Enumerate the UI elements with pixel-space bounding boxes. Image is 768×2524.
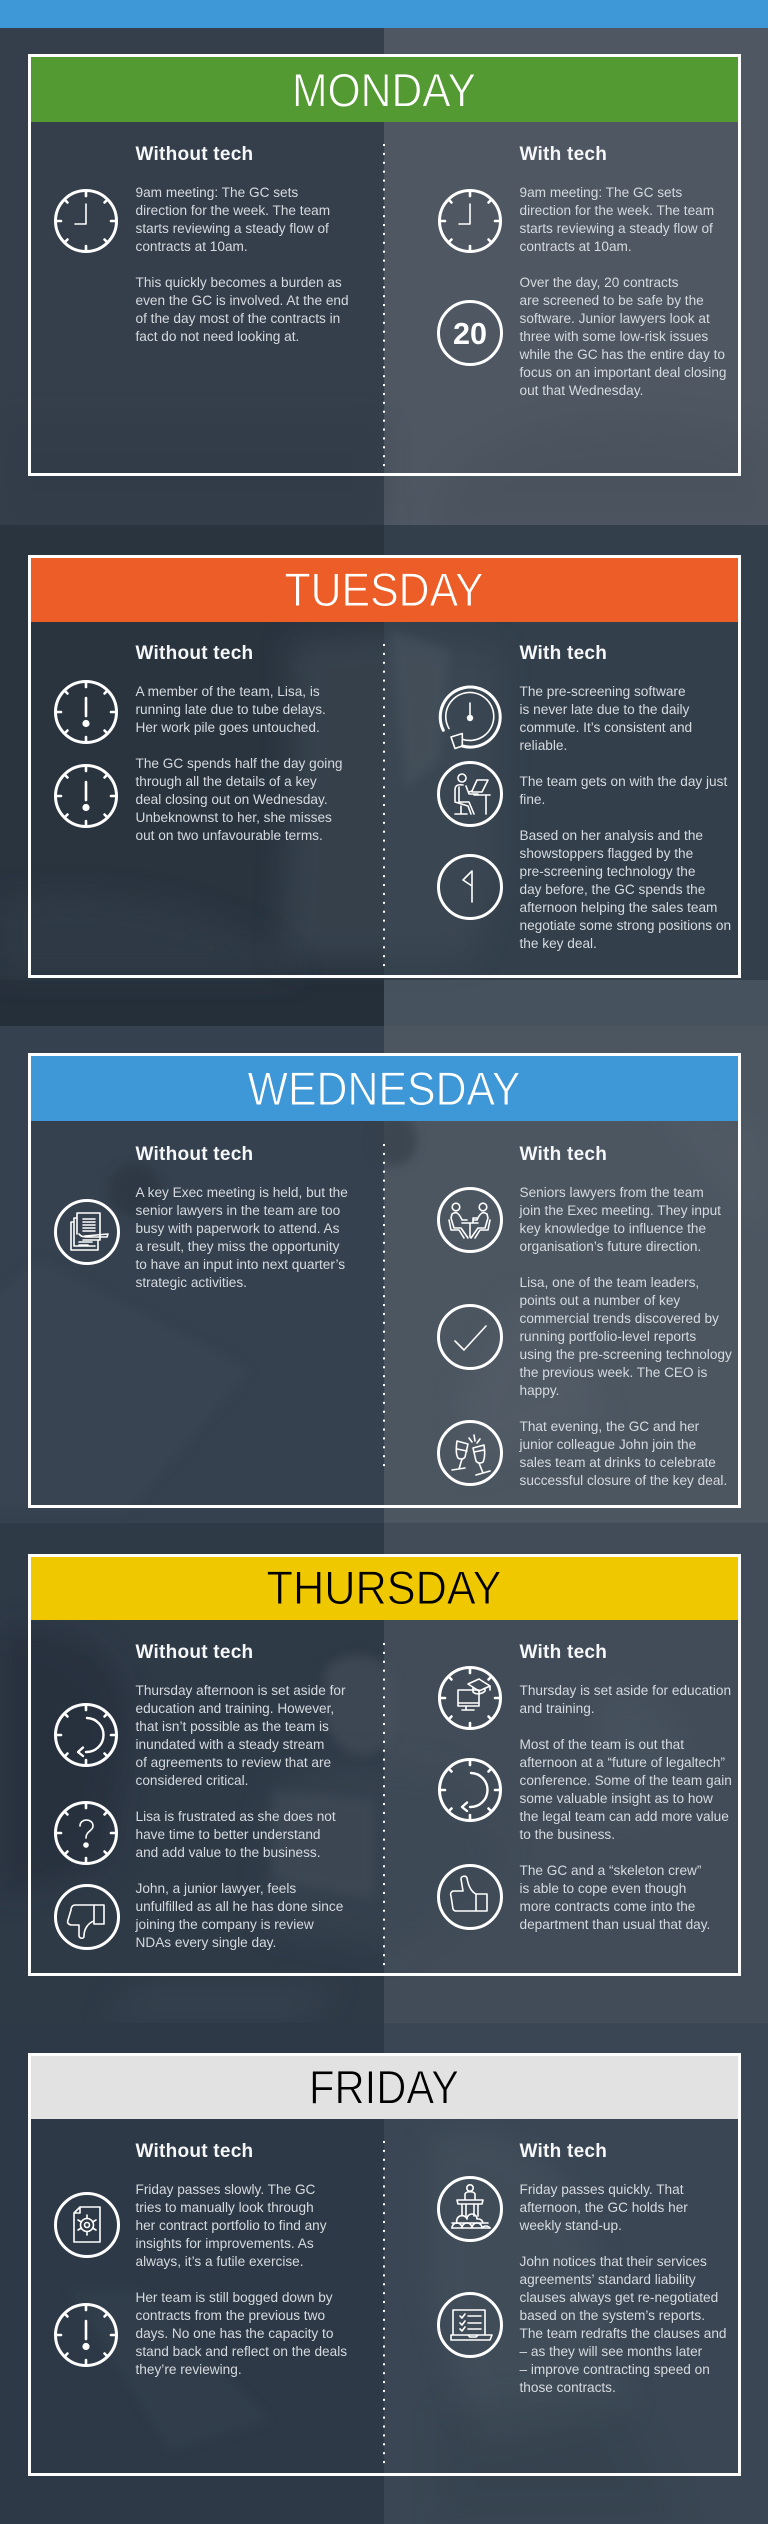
text: monday without tech: even the GC is involved. At the end (136, 293, 349, 308)
text: friday without tech: her contract portfolio to find any (136, 2218, 327, 2233)
text: thursday with tech: and training. (520, 1701, 595, 1716)
text: wednesday with tech: the previous week. The CEO is (520, 1365, 707, 1380)
icon: paperwork (54, 1199, 120, 1265)
heading: tuesday (31, 558, 738, 622)
text: monday with tech: three with some low-risk issues (520, 329, 708, 344)
text: thursday without tech: that isn’t possible as the team is (136, 1719, 329, 1734)
text: friday without tech: always, it’s a futile exercise. (136, 2254, 304, 2269)
panel: wednesday (28, 1053, 741, 1508)
icon: graduation monitor (438, 1666, 502, 1730)
icon: thumbs down (54, 1884, 120, 1950)
heading: wednesday: WEDNESDAY (248, 1062, 520, 1115)
text: thursday with tech: more contracts come into the (520, 1899, 695, 1914)
text: wednesday with tech: running portfolio-level reports (520, 1329, 696, 1344)
label: tuesday without tech: Without tech (136, 643, 253, 664)
text: tuesday without tech: Her work pile goes untouched. (136, 720, 320, 735)
text: friday with tech: clauses always get re-negotiated (520, 2290, 718, 2305)
divider: monday (383, 144, 385, 469)
text: thursday without tech: education and training. However, (136, 1701, 334, 1716)
icon: settings document (54, 2192, 120, 2258)
text: monday with tech: direction for the week. The team (520, 203, 714, 218)
panel: thursday (28, 1554, 741, 1976)
heading: friday: FRIDAY (309, 2060, 459, 2114)
text: tuesday without tech: through all the details of a key (136, 774, 317, 789)
icon: question clock (54, 1801, 118, 1865)
text: monday without tech: direction for the week. The team (136, 203, 330, 218)
text: thursday without tech: inundated with a steady stream (136, 1737, 324, 1752)
text: monday without tech: 9am meeting: The GC sets (136, 185, 298, 200)
panel: monday (28, 54, 741, 476)
text: thursday with tech: some valuable insight as to how (520, 1791, 713, 1806)
text: tuesday with tech (520, 684, 731, 951)
text: monday without tech: of the day most of the contracts in (136, 311, 340, 326)
text: tuesday without tech: out on two unfavourable terms. (136, 828, 323, 843)
text: monday with tech: out that Wednesday. (520, 383, 643, 398)
text: thursday with tech: Thursday is set aside for education (520, 1683, 731, 1698)
text: thursday without tech: and add value to the business. (136, 1845, 321, 1860)
label: monday without tech: Without tech (136, 144, 253, 165)
text: tuesday with tech: afternoon helping the sales team (520, 900, 717, 915)
text: wednesday with tech: using the pre-screening technology (520, 1347, 732, 1362)
heading: thursday (31, 1557, 738, 1620)
label: wednesday without tech: Without tech (136, 1144, 253, 1165)
top bar (0, 0, 768, 28)
text: tuesday with tech: The team gets on with the day just (520, 774, 727, 789)
text: monday with tech: contracts at 10am. (520, 239, 632, 254)
text: friday without tech: Her team is still bogged down by (136, 2290, 333, 2305)
text: wednesday with tech: points out a number of key (520, 1293, 680, 1308)
friday bg (0, 2023, 384, 2524)
text: wednesday without tech: to have an input into next quarter’s (136, 1257, 345, 1272)
text: thursday without tech: Thursday afternoon is set aside for (136, 1683, 346, 1698)
text: friday with tech: agreements’ standard liability (520, 2272, 696, 2287)
icon: flag (437, 854, 503, 920)
text: friday without tech: insights for improvements. As (136, 2236, 314, 2251)
label: monday with tech: With tech (520, 144, 607, 165)
text: monday without tech: contracts at 10am. (136, 239, 248, 254)
text: tuesday without tech: The GC spends half the day going (136, 756, 343, 771)
text: thursday with tech: the legal team can add more value (520, 1809, 729, 1824)
icon: looping clock (54, 1703, 118, 1767)
text: friday without tech: days. No one has the capacity to (136, 2326, 333, 2341)
text: wednesday with tech: That evening, the GC and her (520, 1419, 699, 1434)
text: wednesday with tech: sales team at drinks to celebrate (520, 1455, 716, 1470)
text: wednesday without tech: A key Exec meeting is held, but the (136, 1185, 348, 1200)
text: friday without tech: they’re reviewing. (136, 2362, 242, 2377)
icon: clock (54, 189, 118, 253)
text: thursday without tech: John, a junior lawyer, feels (136, 1881, 296, 1896)
text: thursday without tech: joining the company is review (136, 1917, 314, 1932)
text: monday with tech: starts reviewing a steady flow of (520, 221, 713, 236)
label: thursday with tech: With tech (520, 1642, 607, 1663)
text: thursday with tech: Most of the team is out that (520, 1737, 684, 1752)
text: wednesday with tech: Lisa, one of the team leaders, (520, 1275, 699, 1290)
text: thursday with tech: department than usual that day. (520, 1917, 710, 1932)
text: tuesday with tech: pre-screening technology the (520, 864, 695, 879)
text: tuesday with tech: The pre-screening software (520, 684, 686, 699)
text: wednesday without tech: strategic activities. (136, 1275, 247, 1290)
wednesday bg (0, 1026, 384, 1523)
heading: monday (31, 57, 738, 122)
text: wednesday without tech: senior lawyers in the team are too (136, 1203, 340, 1218)
text: wednesday without tech: a result, they miss the opportunity (136, 1239, 339, 1254)
text: wednesday with tech: Seniors lawyers from the team (520, 1185, 704, 1200)
text: tuesday with tech: reliable. (520, 738, 567, 753)
icon: person at desk (437, 761, 503, 827)
text: tuesday with tech: showstoppers flagged by the (520, 846, 693, 861)
thursday bg (0, 1523, 384, 2023)
tuesday bg (0, 525, 384, 1026)
icon: number 20 (437, 300, 503, 366)
text: monday without tech: This quickly becomes a burden as (136, 275, 342, 290)
icon: thumbs up (437, 1864, 503, 1930)
text: thursday with tech: The GC and a “skeleton crew” (520, 1863, 701, 1878)
text: thursday without tech: considered critical. (136, 1773, 248, 1788)
text: friday without tech: tries to manually look through (136, 2200, 314, 2215)
icon: looping clock (438, 1758, 502, 1822)
text: wednesday with tech: key knowledge to influence the (520, 1221, 706, 1236)
text: friday with tech: based on the system’s reports. (520, 2308, 705, 2323)
icon: champagne toast (437, 1420, 503, 1486)
divider: tuesday (383, 644, 385, 969)
text: friday without tech: stand back and reflect on the deals (136, 2344, 347, 2359)
panel: tuesday (28, 555, 741, 978)
text: friday with tech: The team redrafts the clauses and (520, 2326, 726, 2341)
icon: alert clock (54, 764, 118, 828)
text: tuesday without tech: A member of the team, Lisa, is (136, 684, 320, 699)
label: thursday without tech: Without tech (136, 1642, 253, 1663)
text: monday with tech: Over the day, 20 contracts (520, 275, 678, 290)
icon: podium speaker (437, 2176, 503, 2242)
text: monday with tech: while the GC has the entire day to (520, 347, 725, 362)
icon: alert clock (54, 2303, 118, 2367)
text: thursday without tech: unfulfilled as all he has done since (136, 1899, 343, 1914)
text: thursday without tech: NDAs every single day. (136, 1935, 276, 1950)
text: wednesday with tech: happy. (520, 1383, 559, 1398)
text: tuesday without tech (136, 684, 343, 843)
text: friday without tech: Friday passes slowly. The GC (136, 2182, 315, 2197)
text: wednesday with tech: successful closure of the key deal. (520, 1473, 727, 1488)
text: wednesday with tech (519, 1185, 732, 1488)
text: wednesday with tech: junior colleague John join the (520, 1437, 696, 1452)
text: tuesday with tech: day before, the GC spends the (520, 882, 705, 897)
heading: wednesday (31, 1056, 738, 1121)
divider: friday (383, 2141, 385, 2466)
text: wednesday without tech: busy with paperwork to attend. As (136, 1221, 339, 1236)
text: tuesday without tech: running late due to tube delays. (136, 702, 326, 717)
text: thursday without tech: Lisa is frustrated as she does not (136, 1809, 336, 1824)
label: friday with tech: With tech (520, 2141, 607, 2162)
text: friday with tech (520, 2182, 726, 2395)
heading: thursday: THURSDAY (266, 1561, 502, 1614)
text: monday with tech: focus on an important deal closing (520, 365, 727, 380)
text: friday without tech: contracts from the previous two (136, 2308, 325, 2323)
text: monday with tech: are screened to be safe by the (520, 293, 704, 308)
label: tuesday with tech: With tech (520, 643, 607, 664)
text: friday with tech: – improve contracting speed on (520, 2362, 710, 2377)
text: friday with tech: weekly stand-up. (520, 2218, 622, 2233)
text: tuesday with tech: is never late due to the daily (520, 702, 689, 717)
icon: number 20: 20 (453, 316, 487, 351)
text: thursday with tech: to the business. (520, 1827, 615, 1842)
text: thursday with tech: is able to cope even though (520, 1881, 686, 1896)
text: monday without tech: starts reviewing a steady flow of (136, 221, 329, 236)
text: wednesday with tech: commercial trends discovered by (520, 1311, 719, 1326)
label: wednesday with tech: With tech (520, 1144, 607, 1165)
text: wednesday with tech: organisation’s future direction. (520, 1239, 701, 1254)
icon: recurring clock (438, 686, 502, 750)
text: monday with tech: 9am meeting: The GC sets (520, 185, 682, 200)
icon: alert clock (54, 680, 118, 744)
text: friday without tech (136, 2182, 347, 2377)
text: monday without tech: fact do not need looking at. (136, 329, 299, 344)
text: monday with tech: software. Junior lawyers look at (520, 311, 710, 326)
heading: tuesday: TUESDAY (284, 563, 484, 616)
text: tuesday without tech: Unbeknownst to her, she misses (136, 810, 332, 825)
text: tuesday with tech: fine. (520, 792, 545, 807)
text: monday with tech (520, 185, 727, 398)
text: thursday with tech: conference. Some of the team gain (520, 1773, 732, 1788)
text: thursday without tech (135, 1683, 346, 1950)
text: wednesday without tech (136, 1185, 348, 1290)
text: tuesday with tech: the key deal. (520, 936, 597, 951)
divider: wednesday (383, 1144, 385, 1469)
text: monday without tech (136, 185, 349, 344)
text: friday with tech: Friday passes quickly. That (520, 2182, 684, 2197)
icon: clock (438, 189, 502, 253)
text: tuesday with tech: commute. It’s consistent and (520, 720, 692, 735)
text: friday with tech: those contracts. (520, 2380, 616, 2395)
text: friday with tech: afternoon, the GC holds her (520, 2200, 688, 2215)
icon: check mark (437, 1304, 503, 1370)
text: tuesday without tech: deal closing out on Wednesday. (136, 792, 328, 807)
text: thursday with tech (520, 1683, 732, 1932)
text: thursday with tech: afternoon at a “future of legaltech” (520, 1755, 725, 1770)
text: wednesday with tech: join the Exec meeting. They input (520, 1203, 721, 1218)
icon: meeting (437, 1187, 503, 1253)
text: friday with tech: – as they will see months later (520, 2344, 702, 2359)
text: friday with tech: John notices that their services (520, 2254, 707, 2269)
text: tuesday with tech: Based on her analysis and the (520, 828, 703, 843)
panel: friday (28, 2053, 741, 2476)
monday bg (0, 28, 384, 525)
text: tuesday with tech: negotiate some strong positions on (520, 918, 731, 933)
label: friday without tech: Without tech (136, 2141, 253, 2162)
divider: thursday (383, 1643, 385, 1968)
icon: laptop checklist (437, 2292, 503, 2358)
heading: friday (31, 2056, 738, 2119)
text: thursday without tech: have time to better understand (136, 1827, 321, 1842)
heading: monday: MONDAY (292, 64, 476, 116)
text: thursday without tech: of agreements to review that are (136, 1755, 331, 1770)
